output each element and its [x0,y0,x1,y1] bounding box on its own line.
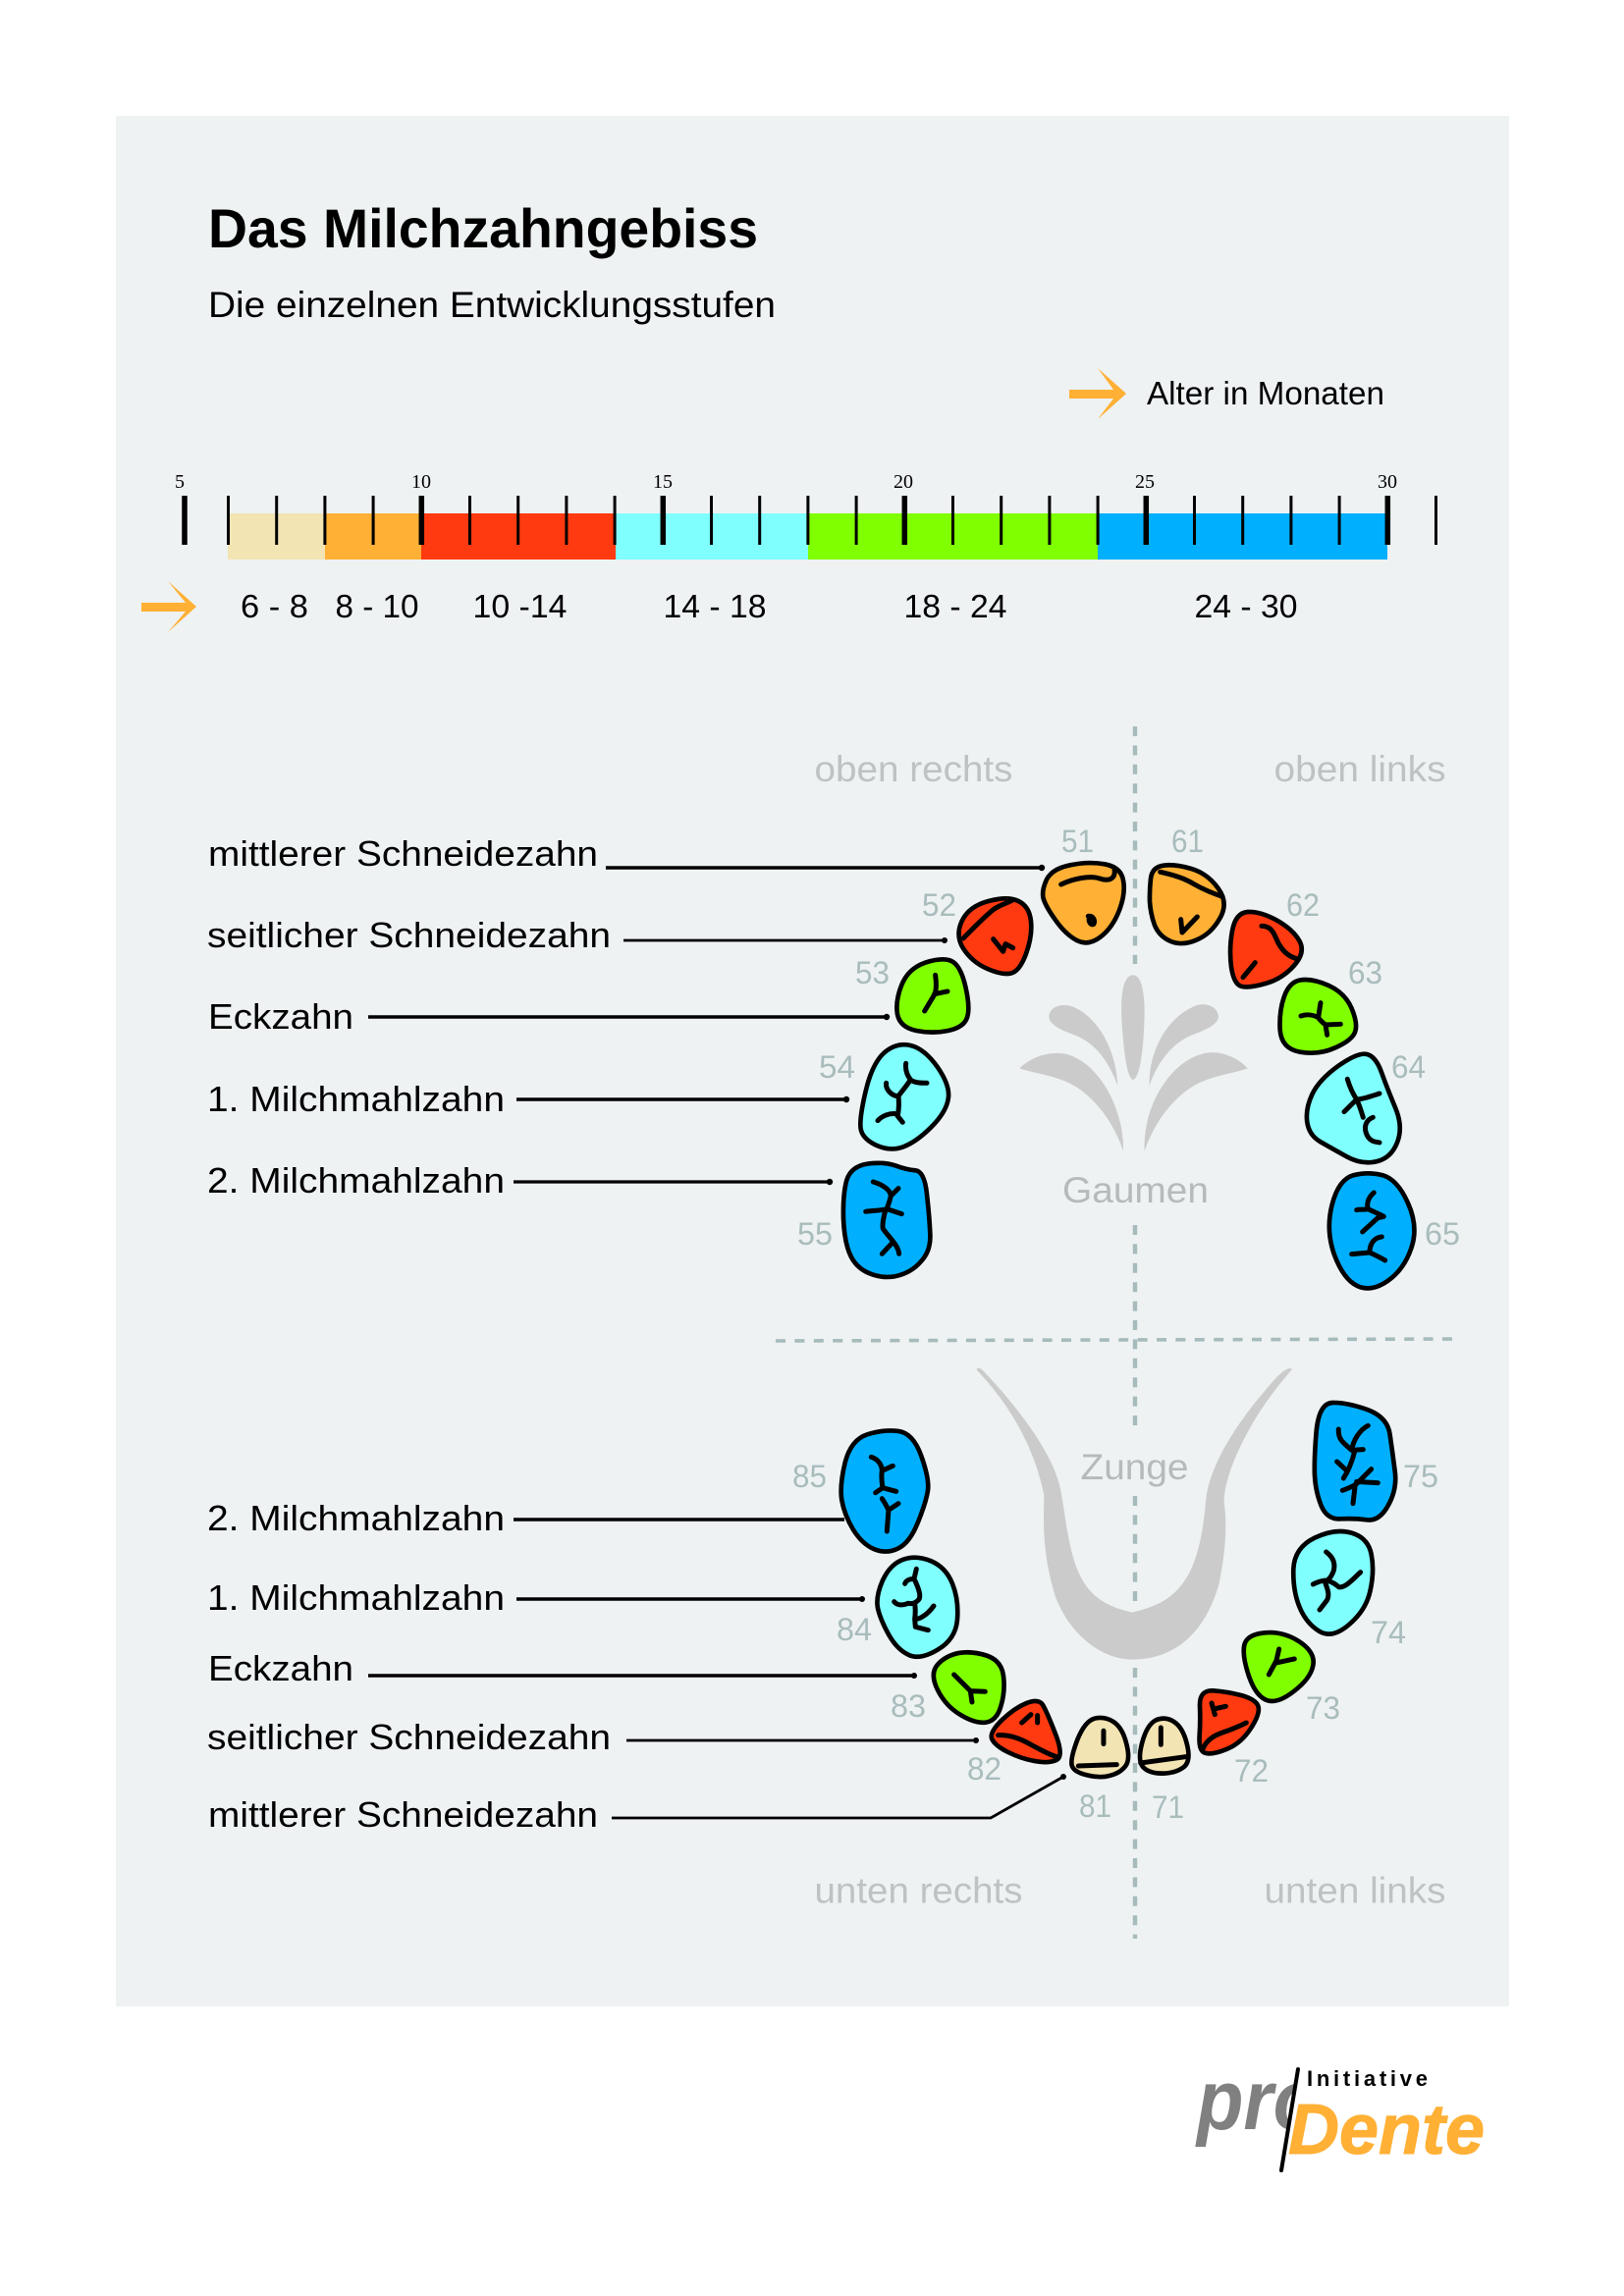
lower labels and leaders: 2. Milchmahlzahn [207,1498,505,1538]
age timeline ruler: 10 [411,471,431,493]
tooth 72 [1200,1690,1269,1789]
tooth 63 [1279,955,1382,1053]
tooth 51: 51 [1061,824,1094,859]
icon: tongue [977,1368,1292,1660]
tooth 54: 54 [819,1049,855,1085]
tooth 63: 63 [1348,955,1382,990]
tooth 65 [1329,1173,1460,1288]
jaw divider dashed lines [776,726,1457,1939]
tooth 55 [797,1163,930,1277]
logo: proDente: Initiative [1307,2066,1428,2091]
logo: proDente: pro [1195,2054,1320,2148]
lower labels and leaders: mittlerer Schneidezahn [208,1794,598,1835]
age timeline ruler: 30 [1378,471,1397,493]
lower labels and leaders: 1. Milchmahlzahn [207,1577,505,1618]
tooth 85: 85 [792,1459,827,1494]
icon: palate [1019,975,1248,1151]
tooth 82: 82 [967,1751,1001,1787]
tooth 64 [1307,1049,1426,1162]
upper labels and leaders: 2. Milchmahlzahn [207,1160,505,1201]
tooth 54 [819,1044,948,1148]
tooth 74 [1293,1531,1406,1650]
age timeline ruler: 25 [1135,471,1155,493]
tooth 75 [1315,1403,1438,1520]
age range labels: 6 - 8 [241,588,308,624]
tooth 81: 81 [1079,1789,1111,1824]
tooth 81 [1071,1718,1128,1824]
age timeline ruler [175,471,1435,560]
tooth 53: 53 [855,955,890,990]
upper labels and leaders: Eckzahn [208,996,353,1037]
tooth 51 [1043,824,1124,942]
lower labels and leaders: Eckzahn [208,1648,353,1688]
panel: background [116,116,1509,2006]
tooth 72: 72 [1234,1753,1269,1789]
tooth 75: 75 [1403,1459,1438,1494]
age timeline ruler: 5 [175,471,185,493]
tooth 61 [1150,824,1224,943]
age range labels: 18 - 24 [903,588,1007,624]
tooth 52 [922,887,1031,974]
logo: proDente [1195,2067,1484,2172]
tooth 55: 55 [797,1216,833,1252]
tooth 83: 83 [891,1688,926,1724]
tooth 71 [1140,1719,1188,1825]
tooth 74: 74 [1371,1615,1406,1650]
tooth 73: 73 [1306,1690,1340,1726]
age range labels: 24 - 30 [1194,588,1298,624]
age range labels: 14 - 18 [664,588,766,624]
tooth 61: 61 [1171,824,1204,859]
tooth 64: 64 [1391,1049,1426,1085]
quadrant label: unten rechts: unten rechts [815,1871,1023,1910]
subtitle: Die einzelnen Entwicklungsstufen [208,285,776,325]
age range labels: 10 -14 [473,588,568,624]
upper labels and leaders: mittlerer Schneidezahn [208,833,598,874]
tooth 62 [1230,887,1320,987]
age timeline ruler: 15 [653,471,673,493]
legend: age in months: Alter in Monaten [1147,375,1384,411]
tooth 73 [1244,1632,1340,1726]
quadrant label: unten links: unten links [1265,1871,1445,1910]
upper labels and leaders: 1. Milchmahlzahn [207,1079,505,1119]
quadrant label: oben rechts: oben rechts [815,749,1013,789]
logo: proDente: Dente [1288,2091,1485,2169]
tooth 84: 84 [837,1612,872,1647]
tooth 53 [855,955,968,1033]
lower labels and leaders: seitlicher Schneidezahn [207,1717,611,1757]
quadrant label: oben links: oben links [1274,749,1445,789]
label: Zunge: Zunge [1080,1447,1188,1487]
upper labels and leaders: seitlicher Schneidezahn [207,915,611,955]
tooth 85 [792,1430,928,1552]
tooth 71: 71 [1152,1789,1184,1825]
tooth 82 [967,1701,1060,1787]
legend: age in months [1069,368,1384,419]
age range labels [141,581,1298,632]
title: Das Milchzahngebiss [208,197,758,259]
tooth 83 [891,1652,1004,1724]
label: Gaumen: Gaumen [1062,1170,1209,1210]
tooth 84 [837,1558,957,1657]
tooth 62: 62 [1286,887,1320,923]
lower labels and leaders [207,1498,1066,1835]
age timeline ruler: 20 [893,471,913,493]
tooth 65: 65 [1425,1216,1460,1252]
age range labels: 8 - 10 [336,588,418,624]
upper labels and leaders [207,833,1045,1201]
tooth 52: 52 [922,887,956,923]
